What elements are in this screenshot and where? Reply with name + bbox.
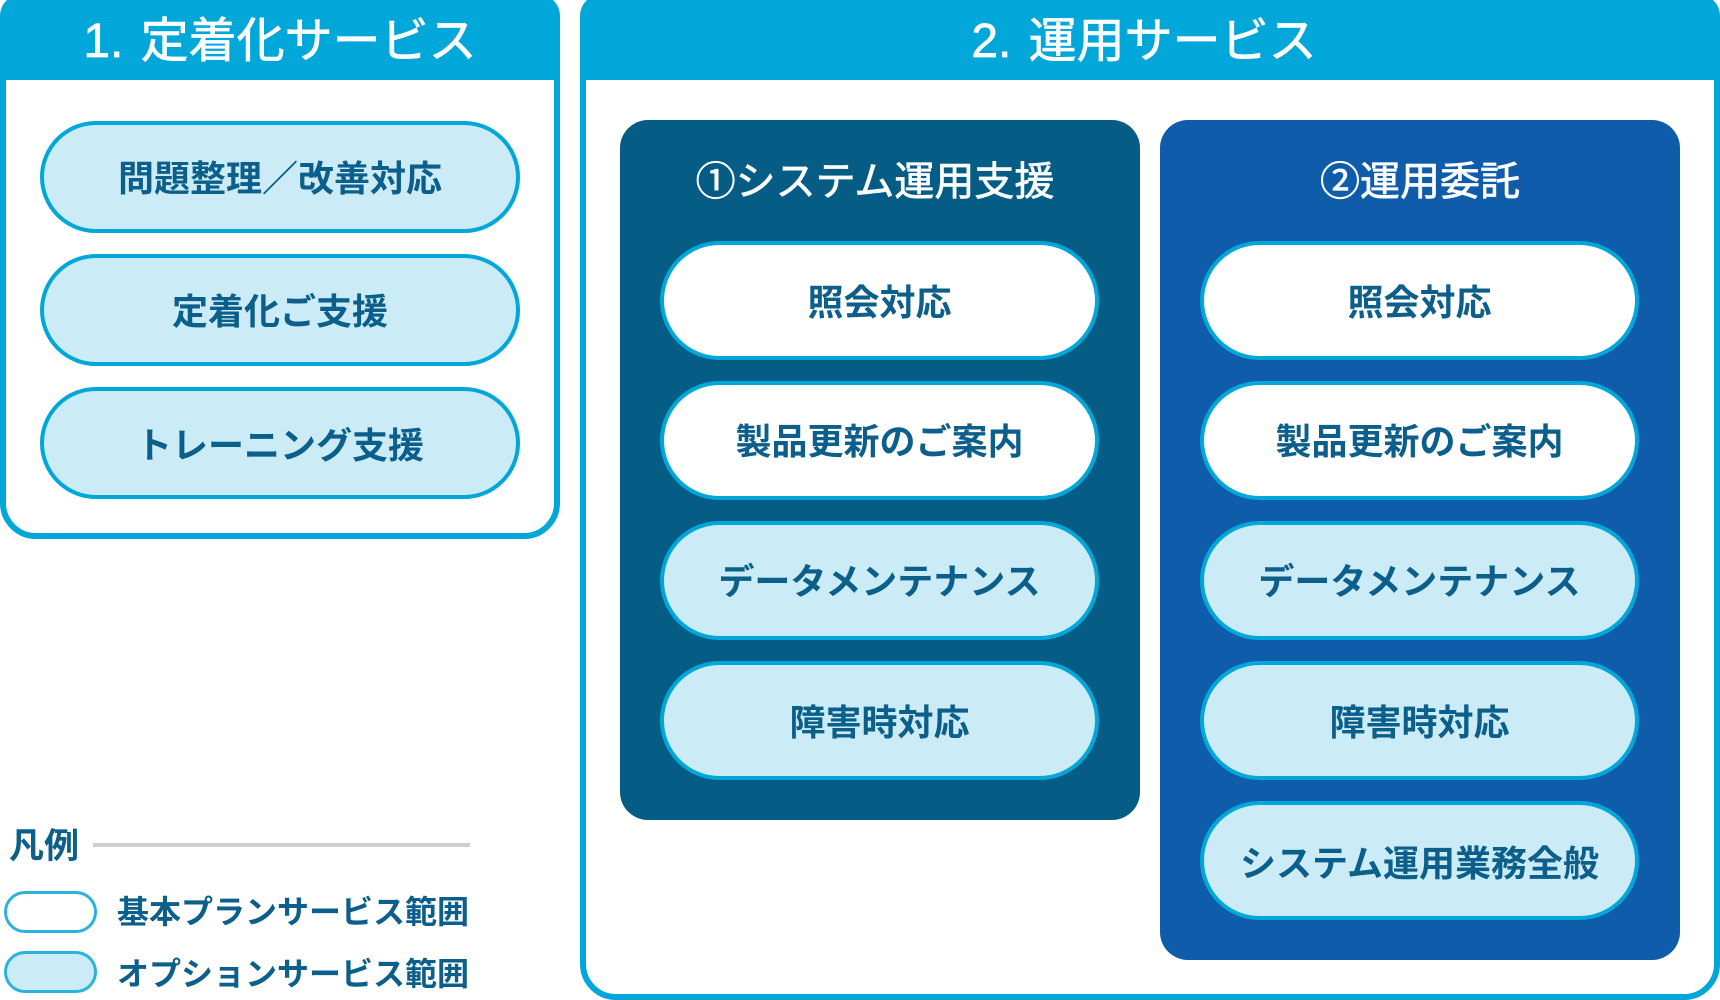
pill: data maintenance bbox=[1200, 521, 1639, 640]
pill: inquiry response bbox=[660, 241, 1099, 360]
pill: product update notice: 製品更新のご案内 bbox=[1275, 420, 1564, 462]
legend divider line bbox=[93, 843, 470, 847]
heading: 1. establishment service: 1. 定着化サービス bbox=[83, 15, 477, 68]
pill: product update notice bbox=[660, 381, 1099, 500]
pill: data maintenance: データメンテナンス bbox=[718, 560, 1041, 602]
legend swatch: base plan bbox=[4, 891, 97, 933]
pill: data maintenance: データメンテナンス bbox=[1258, 560, 1581, 602]
pill: establishment support bbox=[40, 254, 520, 366]
pill: all system operation tasks: システム運用業務全般 bbox=[1240, 842, 1599, 884]
panel: 1. establishment service bbox=[0, 0, 560, 539]
pill: failure response: 障害時対応 bbox=[789, 702, 970, 742]
heading: 2. operation service: 2. 運用サービス bbox=[971, 15, 1317, 68]
pill: failure response bbox=[1200, 661, 1639, 780]
pill: training support bbox=[40, 387, 520, 499]
panel: operation outsourcing bbox=[1160, 120, 1680, 960]
pill: inquiry response: 照会対応 bbox=[807, 282, 952, 322]
subheading: system operation support: ①システム運用支援 bbox=[696, 160, 1054, 204]
pill: training support: トレーニング支援 bbox=[136, 425, 424, 466]
pill: product update notice: 製品更新のご案内 bbox=[735, 420, 1024, 462]
pill: inquiry response: 照会対応 bbox=[1347, 282, 1492, 322]
legend swatch: option bbox=[4, 951, 97, 993]
pill: establishment support: 定着化ご支援 bbox=[172, 291, 388, 332]
legend title: 凡例 bbox=[9, 827, 79, 866]
pill: problem organization bbox=[40, 121, 520, 233]
heading: 1. establishment service bbox=[0, 0, 560, 80]
pill: data maintenance bbox=[660, 521, 1099, 640]
panel: system operation support bbox=[620, 120, 1140, 820]
heading: 2. operation service bbox=[580, 0, 1720, 80]
legend label: option: オプションサービス範囲 bbox=[117, 956, 469, 992]
legend label: base plan: 基本プランサービス範囲 bbox=[117, 894, 469, 930]
pill: problem organization: 問題整理／改善対応 bbox=[118, 158, 442, 199]
legend bbox=[4, 827, 470, 993]
pill: product update notice bbox=[1200, 381, 1639, 500]
pill: all system operation tasks bbox=[1200, 801, 1639, 920]
pill: inquiry response bbox=[1200, 241, 1639, 360]
pill: failure response: 障害時対応 bbox=[1329, 702, 1510, 742]
subheading: operation outsourcing: ②運用委託 bbox=[1320, 160, 1520, 204]
panel: 2. operation service bbox=[580, 0, 1720, 1000]
pill: failure response bbox=[660, 661, 1099, 780]
